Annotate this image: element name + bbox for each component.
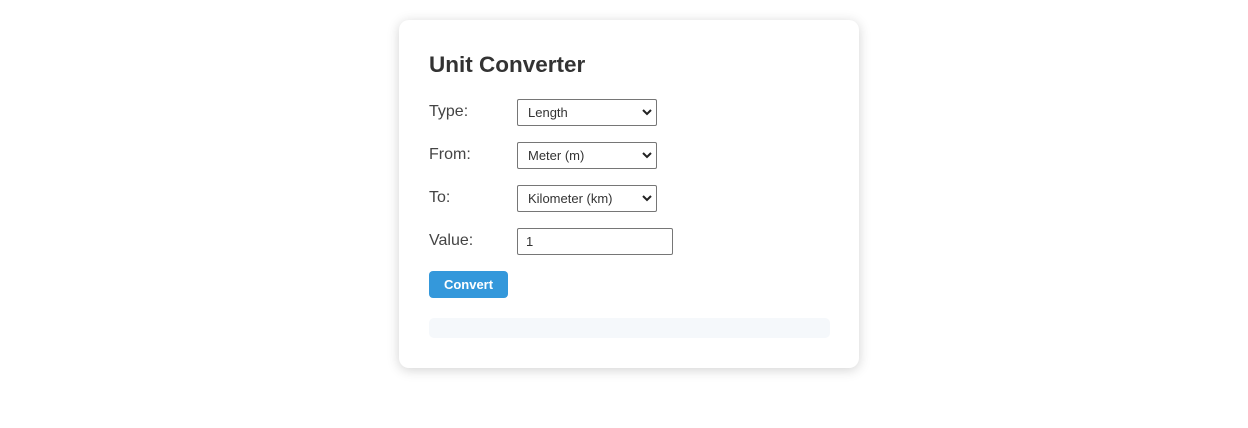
title: Unit Converter: [429, 52, 585, 77]
button: convert: Convert: [444, 277, 493, 292]
select: to: [517, 185, 657, 212]
select: from: Meter (m): [528, 148, 584, 163]
input: value: [517, 228, 673, 255]
select: from: [517, 142, 657, 169]
label: from: From:: [429, 146, 471, 163]
label: value: Value:: [429, 232, 473, 249]
result box: [429, 318, 830, 338]
select: to: Kilometer (km): [528, 191, 613, 206]
panel: unit converter card: [399, 20, 859, 368]
label: type: Type:: [429, 103, 468, 120]
input: value: 1: [526, 234, 533, 249]
button: convert: [429, 271, 508, 298]
select: type: Length: [528, 105, 568, 120]
select: type: [517, 99, 657, 126]
label: to: To:: [429, 189, 450, 206]
